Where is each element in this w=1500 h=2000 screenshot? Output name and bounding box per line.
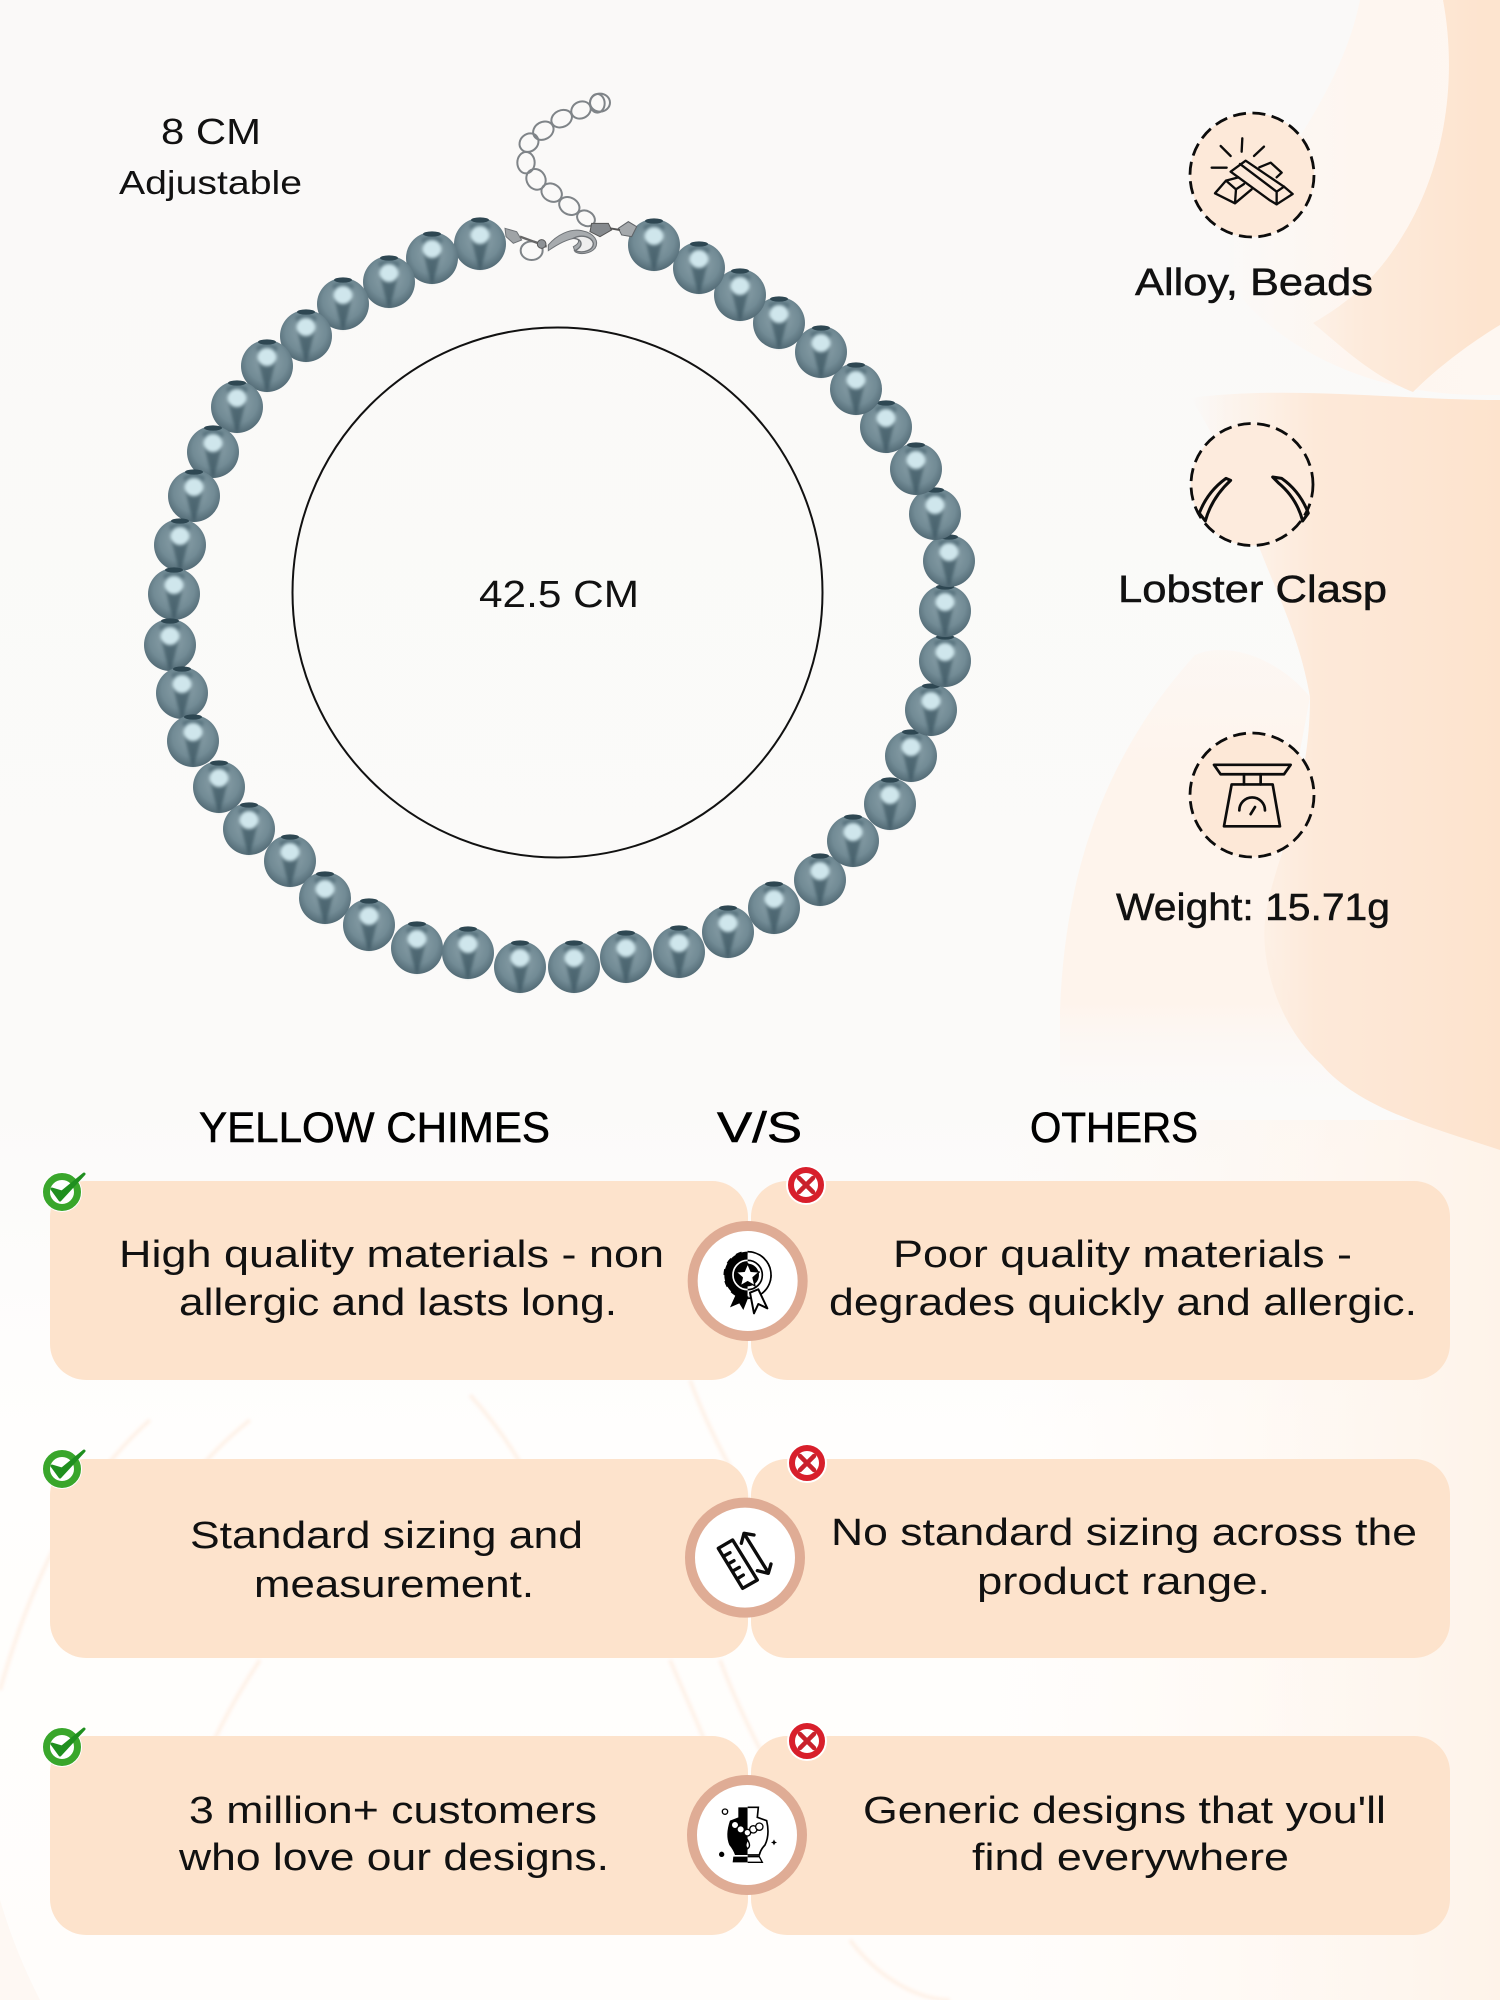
spec: clasp xyxy=(1118,424,1387,611)
heading: YELLOW CHIMES: YELLOW CHIMES xyxy=(199,1104,550,1152)
panel: others designs: Generic designs that you'll xyxy=(863,1790,1386,1832)
icon: ruler and arrow xyxy=(690,1503,800,1613)
icon: clasp arcs xyxy=(1199,477,1308,521)
panel: yellow chimes materials: High quality materials - non xyxy=(119,1234,664,1276)
panel: yellow chimes designs: who love our designs. xyxy=(178,1837,609,1879)
spec: material xyxy=(1135,113,1373,304)
spec: weight xyxy=(1116,733,1390,929)
heading: OTHERS: OTHERS xyxy=(1030,1104,1198,1152)
panel: others materials: Poor quality materials - xyxy=(893,1234,1352,1276)
icon: red cross xyxy=(786,1165,826,1205)
panel: others sizing: No standard sizing across the xyxy=(831,1512,1417,1554)
icon: quality rosette badge xyxy=(693,1226,803,1336)
diameter circle with 42.5 CM label xyxy=(292,328,822,858)
icon: gold bars xyxy=(1212,138,1293,204)
panel: others sizing xyxy=(751,1459,1450,1658)
icon: red cross xyxy=(787,1443,827,1483)
necklace: extender chain and lobster clasp xyxy=(505,94,637,260)
comparison row 1: materials xyxy=(42,1165,1450,1380)
necklace: pearl beads xyxy=(144,217,975,993)
icon: green check xyxy=(42,1727,84,1767)
panel: yellow chimes materials: allergic and lasts long. xyxy=(179,1282,617,1324)
panel: others sizing: product range. xyxy=(977,1561,1270,1603)
panel: yellow chimes sizing: Standard sizing and xyxy=(190,1515,583,1557)
icon: red cross xyxy=(787,1721,827,1761)
spec: material: Alloy, Beads xyxy=(1135,262,1373,304)
panel: others materials xyxy=(751,1181,1450,1380)
icon: weighing scale xyxy=(1214,765,1291,826)
heading: V/S: V/S xyxy=(717,1104,802,1152)
size label: 8 CM adjustable: 8 CM xyxy=(161,111,261,152)
panel: yellow chimes designs: 3 million+ customers xyxy=(189,1790,597,1832)
spec: clasp: Lobster Clasp xyxy=(1118,569,1387,611)
comparison row 2: sizing xyxy=(42,1443,1450,1658)
comparison row 3: designs xyxy=(42,1721,1450,1935)
panel: yellow chimes materials xyxy=(50,1181,748,1380)
panel: others materials: degrades quickly and allergic. xyxy=(829,1282,1417,1324)
icon: green check xyxy=(42,1172,84,1212)
diameter circle with 42.5 CM label: 42.5 CM xyxy=(479,574,639,616)
panel: yellow chimes sizing: measurement. xyxy=(254,1564,534,1606)
icon: green check xyxy=(42,1449,84,1489)
panel: others designs: find everywhere xyxy=(972,1837,1289,1879)
size label: 8 CM adjustable xyxy=(119,111,302,201)
panel: yellow chimes sizing xyxy=(50,1459,748,1658)
spec: weight: Weight: 15.71g xyxy=(1116,887,1390,929)
panel: yellow chimes designs xyxy=(50,1736,748,1935)
panel: others designs xyxy=(751,1736,1450,1935)
icon: necklace bust xyxy=(692,1780,802,1890)
size label: 8 CM adjustable: Adjustable xyxy=(119,164,302,201)
